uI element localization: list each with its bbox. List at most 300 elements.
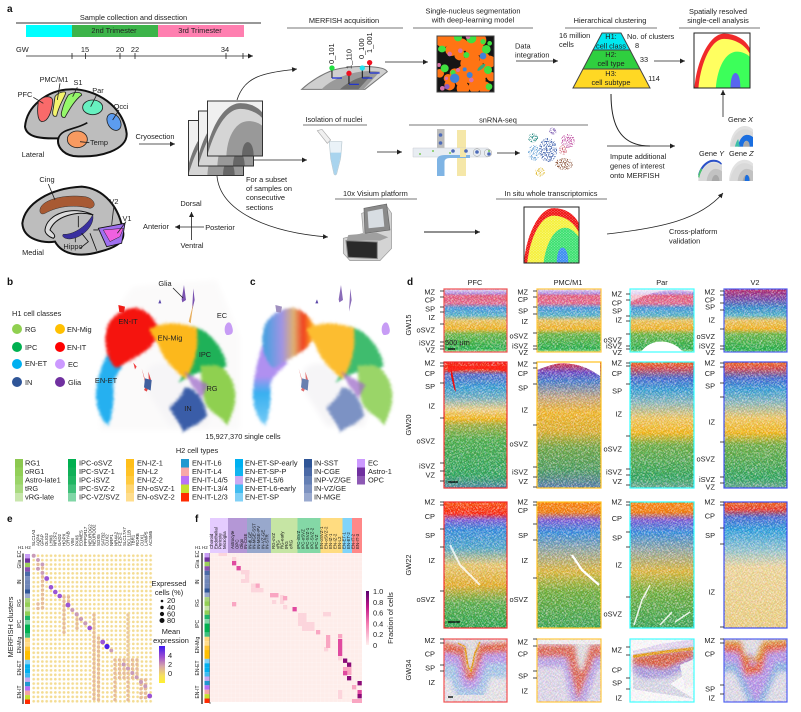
class labels: EC [195,550,201,557]
column RG: oRG1 [25,467,44,476]
gene labels: LAMP5 [144,531,149,546]
UMAP labels: EN-ET [95,376,118,385]
column RG: vRG-late [25,492,54,502]
column EN-IT: EN-IT-L4 [192,467,222,476]
row: GW15: VZ [706,348,715,357]
legend: mean expression: 2 [168,660,172,669]
column titles [468,278,760,287]
icon: lateral brain: Temp [90,138,108,147]
arrow to clusters [497,152,520,154]
gene labels: PPP1R17 [83,526,88,546]
pyramid: hierarchy of cell classes: H1: [605,32,617,41]
column RG: tRG [25,484,38,493]
row: GW15: SP [705,302,715,312]
UMAP coloured by H2 [255,285,390,429]
row: GW22: CP [705,512,715,520]
gene labels: RORB [135,533,140,546]
header labels: Pericyte [218,533,222,549]
class labels: EN-ET [195,660,201,676]
row: GW15: MZ [704,288,715,296]
UMAP labels: RG [206,384,218,393]
gene labels: AQP4 [35,534,40,546]
arrow: cross-platform validation: validation [669,236,700,246]
row: GW20: SP [425,382,435,391]
gestational week axis: GW [16,45,29,54]
MERFISH slide with readout probes: 0_100 [357,38,366,59]
class labels: Glia [195,559,201,568]
icon: medial brain: V2 [109,197,119,206]
gene expression maps: Gene Y [699,149,725,158]
gene labels: SATB2 [100,532,105,546]
column IPC: IPC-SVZ-2 [79,484,115,493]
header labels: EN-oSVZ-1 [319,526,324,549]
UMAP labels: IN [184,404,192,413]
heading: hierarchical clustering: Hierarchical clustering [574,16,646,25]
header labels: IPC-iSVZ [296,530,301,549]
gene labels [31,524,153,546]
legend: mean expression: expression [153,636,189,645]
row: GW34: SP [425,664,435,672]
gestational week axis: 22 [131,45,139,54]
icon: lateral brain: Par [92,86,104,95]
row titles: GW34 [404,660,413,680]
labels: cluster counts: 16 million [559,31,590,40]
row: GW22: MZ [611,498,622,506]
row: GW15: IZ [521,317,528,326]
icon: medial brain: Medial [22,248,44,257]
row: GW22: MZ [704,498,715,506]
trimester bar: 2nd Trimester [91,26,137,35]
row: GW20: oSVZ [510,440,528,448]
arrow: data integration: Data [515,42,532,50]
column IPC: IPC-SVZ-1 [79,467,115,476]
icon: lateral brain: Occi [114,102,129,111]
header labels: IN-MGE-SST [252,523,257,549]
trimester bar [26,25,244,37]
gene labels: PAX6 [74,535,79,546]
H1 H2 header: H1 H2 [18,545,31,550]
heatmap [210,553,362,703]
legend: fraction of cells [366,587,395,650]
legend: expressed cells: 20 [167,596,175,605]
pyramid: hierarchy of cell classes: cell subtype [591,78,631,87]
icon: nuclei tube [317,129,342,175]
icon: lateral brain: PFC [18,90,33,99]
header labels: RG-oVZ [271,533,276,549]
compass: anatomical directions: Dorsal [180,199,202,208]
row: GW20: iSVZ [512,468,528,476]
arrow: cryosection: Cryosection [135,132,175,141]
header labels: EN-IZ-1 [328,533,333,549]
gestational week axis [16,45,253,59]
gene labels: SLC17A7 [122,527,127,546]
column RG [15,458,61,502]
column EN-ET: EN-ET-L6-early [245,484,296,493]
row: GW20: CP [612,369,622,378]
row: GW15: SP [518,306,528,316]
gestational week axis: 20 [116,45,124,54]
class labels: RG [195,599,201,607]
column EN-Mig: EN-oSVZ-2 [137,492,175,502]
legend: fraction of cells: 1.0 [373,587,383,596]
arrow to in situ [424,231,480,233]
gene labels: SOX5 [96,534,101,546]
row: GW15: iSVZ [699,342,715,350]
panel e: dot plot [6,514,189,704]
row: GW34: CP [612,666,622,674]
column IPC: IPC-oSVZ [79,458,113,468]
row: GW34: MZ [704,636,715,645]
column EN-Mig: EN-IZ-2 [137,476,163,484]
panel b: H1 UMAP [7,277,240,430]
column EN-Mig: EN-IZ-1 [137,458,163,468]
row: GW22: IZ [521,556,528,565]
cluster class labels: EC [17,550,23,557]
caption: subset of samples [246,175,292,212]
row: GW20: SP [705,382,715,390]
cluster colour strip [23,554,30,704]
heading: segmentation: Single-nucleus segmentation [426,6,520,16]
gene labels: FEZF2 [118,532,123,546]
row: GW20: MZ [424,358,435,368]
row: GW15: 500 µm [445,338,470,347]
row: GW15: oSVZ [604,336,622,344]
header labels: IN-VZ-GE [260,530,266,549]
gene labels: NRP1 [109,534,114,546]
image: Visium spots [524,207,579,263]
icon: Visium instrument [343,204,392,261]
row: GW20: VZ [613,477,622,486]
column IN: INP-VZ/GE [314,476,351,484]
panel label f: f [195,514,199,525]
row: GW22: SP [518,531,528,540]
caption: subset of samples: consecutive [246,193,285,202]
labels: cluster counts [559,31,675,83]
legend: H1 cell classes: EN-ET [25,359,48,368]
gene labels: TBR1 [131,534,136,546]
row: GW15: VZ [426,346,435,354]
UMAP labels [95,279,228,413]
arrows from stack [217,69,328,237]
arrow to snRNA-seq [377,151,402,153]
image: spatial domains [694,33,750,88]
UMAP labels: EN-Mig [158,334,182,342]
legend: fraction of cells: 0.4 [373,620,383,628]
class labels [195,550,201,699]
gene expression maps: Gene X [728,115,754,124]
legend: fraction of cells: 0.2 [373,630,383,639]
row: GW22: CP [612,514,622,523]
row: GW15: IZ [708,316,715,324]
legend: expressed cells: 80 [167,616,175,625]
heading: segmentation [413,6,533,28]
row: GW22: IZ [615,560,622,570]
gene labels: SLC1A3 [31,529,36,546]
cluster class labels: IN [17,579,23,584]
column IN: IN-MGE [314,492,341,502]
pyramid: hierarchy of cell classes: cell class [596,42,626,50]
heading: hierarchical clustering [565,16,657,28]
class labels: EN-Mig [195,636,201,653]
header labels: Oligo [239,538,244,549]
header labels: Endothelial [213,527,218,549]
cluster class labels: RG [17,599,23,607]
row: GW22: IZ [708,588,715,596]
legend: fraction of cells: Fraction of cells [386,592,395,644]
row titles: GW15 [404,315,413,335]
header labels: IN-MGE-PV [256,526,261,549]
header labels: tRG [284,541,289,549]
icon: medial brain: Hippo [63,242,83,251]
gene labels: CRYAB [66,531,71,546]
row: GW15: oSVZ [697,332,715,341]
legend: mean expression: 0 [168,669,172,678]
row: GW34: CP [705,650,715,658]
row: GW34: IZ [615,694,622,702]
panel label c: c [250,277,256,288]
UMAP labels: EC [217,311,228,320]
gene labels: EOMES [79,530,84,546]
UMAP coloured by H1 [98,280,240,430]
caption: subset of samples: For a subset [246,175,287,184]
column EC and Glia: Astro-1 [368,467,392,476]
panel a: experimental workflow [7,4,760,263]
labels: cluster counts: 114 [648,74,660,83]
header labels: EN-IT-2 [350,533,356,549]
header labels: IPC-VZ [314,534,319,549]
H1 H2 header: H1 H2 [195,545,208,550]
header labels: EN-ET-1 [342,532,346,549]
pyramid: hierarchy of cell classes: H2: [605,50,617,59]
row: GW15: MZ [517,288,528,296]
class labels: IPC [195,619,201,628]
icon: lateral brain: Lateral [22,150,45,159]
column EN-IT: EN-IT-L4/5 [192,476,228,484]
header labels: EN-IT-3 [355,533,360,549]
row: GW15: VZ [613,348,622,357]
legend: H2 cell types [15,446,392,502]
legend: fraction of cells: 0 [373,641,377,650]
header labels: Astrocyte [230,530,235,549]
gestational week axis: 34 [221,45,229,54]
panel label a: a [7,4,13,15]
gene labels: BCL11B [126,530,131,546]
gene labels: HOPX [61,533,66,546]
row: GW20: MZ [517,360,528,368]
header labels: oRG [288,539,294,549]
row: GW15: MZ [611,290,622,298]
row: GW15: oSVZ [510,332,528,340]
legend: expressed cells [152,579,186,625]
row: GW22: oSVZ [510,595,528,604]
legend: mean expression: Mean [162,627,180,636]
row: GW20: MZ [704,358,715,368]
arrow: data integration: integration [515,50,550,60]
heading: MERFISH acquisition [287,16,403,28]
header labels: EN-L2 [337,536,342,549]
class labels: IN [195,579,201,584]
MERFISH slide with readout probes [302,32,387,89]
column EC and Glia: OPC [368,476,385,484]
tissue section stack [188,100,263,176]
pyramid: hierarchy of cell classes: H3: [605,69,617,78]
caption: cell count: 15,927,370 single cells [205,432,281,441]
legend: H1 cell classes: Glia [68,378,82,387]
pyramid: hierarchy of cell classes: cell type [597,59,625,68]
heading: spatial analysis [679,7,760,28]
arrow: impute [607,94,675,146]
column RG: RG1 [25,458,40,468]
row: GW15: iSVZ [606,342,622,350]
text: impute genes [610,152,667,180]
cluster class labels [17,550,23,699]
column EN-IT [181,458,228,502]
panel c: H2 UMAP [205,277,390,441]
row: GW34: MZ [424,636,435,645]
image: segmented nuclei [437,34,494,93]
heading: segmentation: with deep-learning model [431,16,515,24]
row: GW15 [417,288,787,357]
legend: expressed cells: cells (%) [155,588,183,597]
header labels: Choroid [209,533,214,549]
UMAP labels: EN-IT [118,317,138,326]
cluster class labels: Glia [17,559,23,568]
gene expression maps [698,115,755,181]
column IPC: IPC-iSVZ [79,476,110,484]
row: GW22: MZ [517,498,528,506]
row: GW15: CP [425,296,435,304]
gene labels: CUX1 [139,534,144,546]
row: GW22: oSVZ [417,595,435,604]
legend: H1 cell classes: IN [25,378,32,387]
legend: H1 cell classes: RG [25,325,36,334]
row: GW20: CP [705,369,715,378]
row: GW15: iSVZ [419,338,435,348]
legend: H1 cell classes: H1 cell classes [12,309,62,318]
arrow: data integration [515,42,558,61]
gene labels: OLIG2 [44,533,49,546]
row: GW22: SP [425,531,435,540]
column IPC: IPC-VZ/SVZ [79,492,120,502]
gene labels: LHX6 [48,534,53,546]
compass: anatomical directions [143,199,235,250]
panel label b: b [7,277,13,288]
MERFISH slide with readout probes: 0_101 [327,43,336,64]
row: GW20: CP [518,369,528,378]
row: GW22: SP [705,531,715,540]
header labels [209,523,360,549]
legend: H1 cell classes: IPC [25,343,38,352]
header labels: RG-early [280,531,285,549]
row titles: GW22 [404,555,413,575]
header labels: Microglia [222,531,227,549]
row: GW15: SP [425,304,435,314]
caption: subset of samples: of samples on [246,184,292,193]
row: GW20: IZ [521,406,528,414]
row: GW20: oSVZ [604,444,622,454]
row: GW22 [417,498,787,628]
cluster class labels: EN-Mig [17,636,23,653]
row: GW20 [417,358,787,492]
gene expression maps: Gene Z [729,149,754,158]
header labels: vRG [276,540,280,549]
row: GW20: iSVZ [419,462,435,470]
heading: MERFISH acquisition: MERFISH acquisition [309,16,379,25]
row: GW20: CP [425,369,435,378]
legend: H1 cell classes: EN-IT [67,343,87,352]
header labels: IN-STR [265,534,270,549]
row: GW20: oSVZ [697,454,715,464]
axis: MERFISH clusters: MERFISH clusters [6,596,15,657]
icon: lateral brain [18,75,129,159]
row: GW20: oSVZ [417,436,435,446]
gene labels: NR4A2 [113,531,118,546]
MERFISH slide with readout probes: 1_001 [365,32,374,53]
column RG: Astro-late1 [25,476,61,484]
row: GW20: SP [518,384,528,392]
gene labels: NR2F2 [53,532,58,546]
row: GW20: VZ [706,482,715,492]
row: GW15: oSVZ [417,326,435,334]
column EN-IT: EN-IT-L2/3 [192,492,228,502]
column EN-IT: EN-IT-L3/4 [192,484,228,493]
row: GW15: SP [612,306,622,316]
row: GW20: iSVZ [606,468,622,476]
row: GW20: VZ [519,477,528,486]
row: GW34: MZ [517,638,528,646]
header labels: IN-CGE [243,534,248,549]
column EN-Mig: EN-L2 [137,467,158,476]
legend: expressed cells: 60 [167,610,175,618]
column IPC [68,458,120,502]
labels: cluster counts: cells [559,40,574,49]
compass: anatomical directions: Ventral [180,241,204,250]
row: GW15: IZ [428,313,435,322]
row: GW20: SP [612,386,622,396]
heading: sample collection: Sample collection and dissection [80,13,187,22]
cluster colour strip [202,553,210,704]
row: GW34: CP [518,650,528,658]
gene labels: NEUROG2 [87,524,92,546]
header labels: IN-dLGE [248,532,252,549]
column titles: PFC [468,278,483,287]
icon: lateral brain: PMC/M1 [40,75,68,84]
icon: lateral brain: S1 [73,78,83,87]
gene labels: GFAP [40,534,45,546]
row: GW15: VZ [519,348,528,357]
row: GW20: IZ [428,402,435,410]
column EC and Glia: EC [368,458,379,468]
heading: isolation of nuclei: Isolation of nuclei [305,115,363,124]
gene labels: VIM [70,538,75,546]
legend: H1 cell classes: EN-Mig [67,325,92,334]
header labels: OPC [234,539,240,549]
column EN-ET [235,458,298,502]
column titles: V2 [750,278,760,287]
row: GW34 [424,635,789,702]
arrow: cross-platform validation [607,193,723,246]
column titles: Par [656,278,668,287]
caption: subset of samples: sections [246,203,273,212]
legend: expressed cells: Expressed [152,579,186,588]
icon: medial brain [22,175,132,257]
row: GW15: CP [612,298,622,308]
column EN-ET: EN-ET-L5/6 [245,476,284,484]
column EN-ET: EN-ET-SP-early [245,458,298,468]
legend: fraction of cells: 0.6 [373,608,383,618]
column EN-IT: EN-IT-L6 [192,458,222,468]
column IN: IN-CGE [314,467,340,476]
